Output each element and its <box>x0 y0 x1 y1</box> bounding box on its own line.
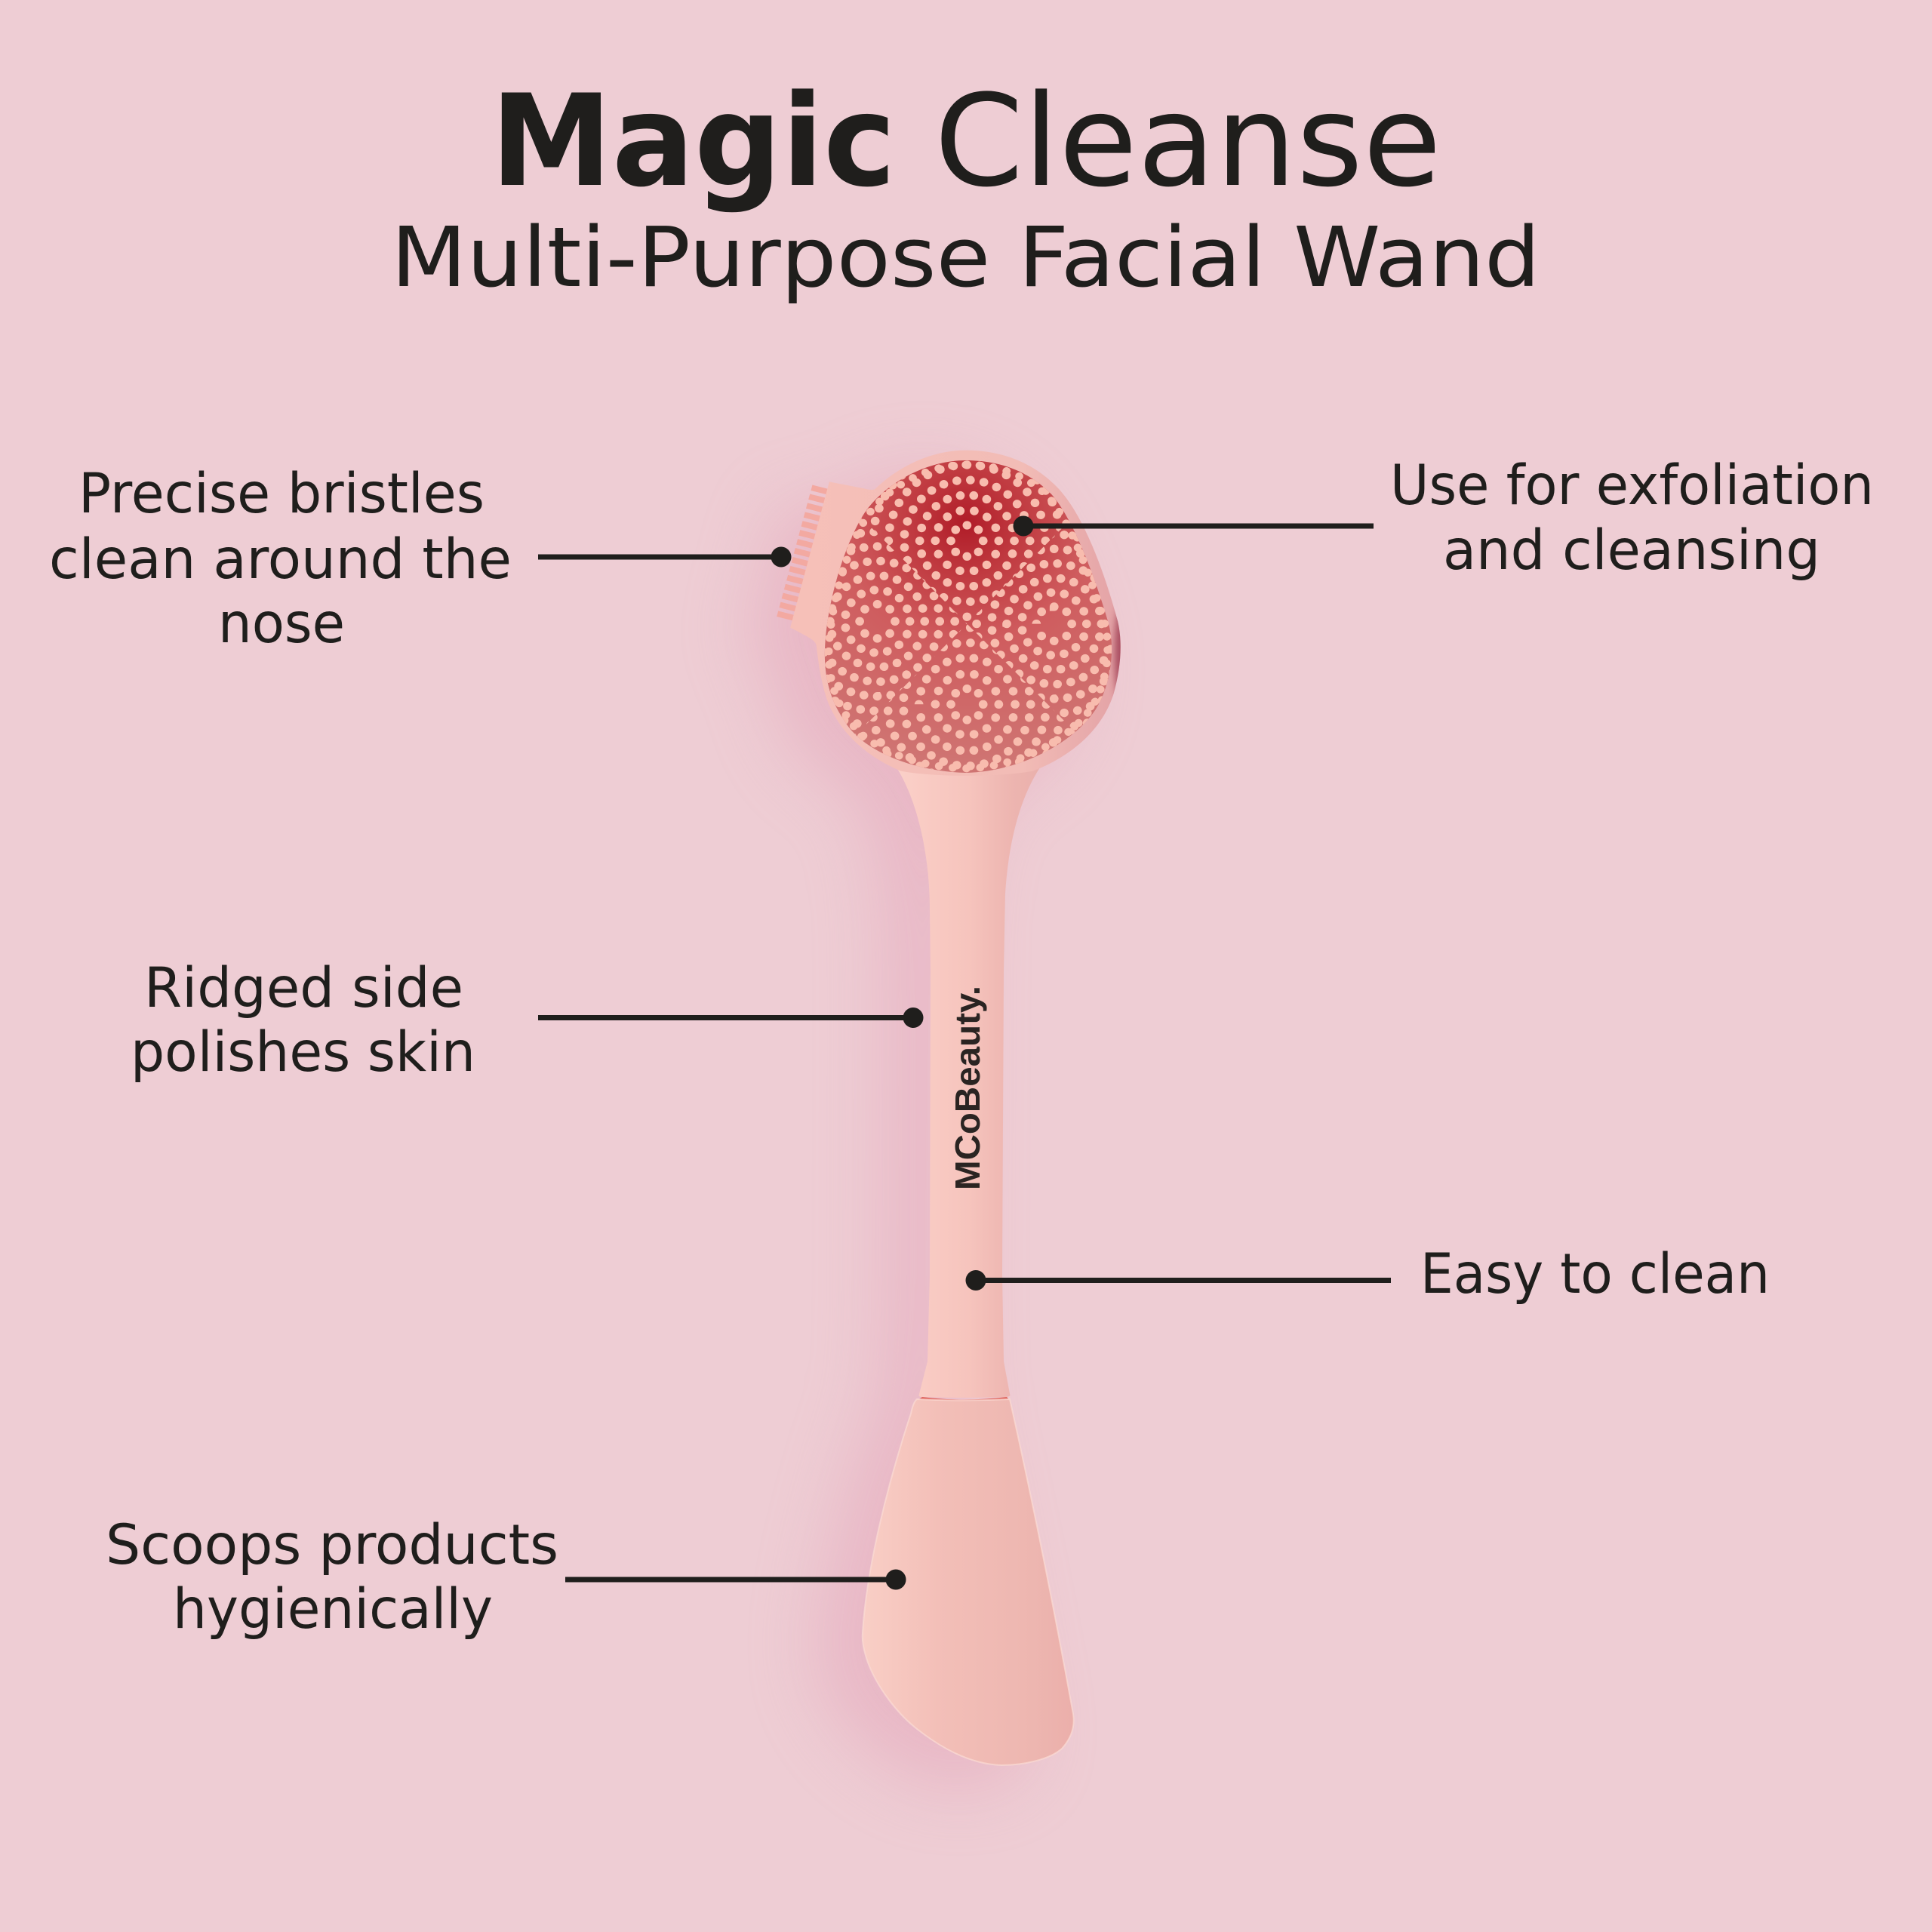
label: clean around the <box>49 528 512 592</box>
bristle dots <box>825 460 1112 770</box>
subtitle: Multi-Purpose Facial Wand <box>391 209 1540 306</box>
brush head <box>777 450 1121 776</box>
label: Ridged side <box>144 956 463 1020</box>
product: facial wand <box>777 450 1121 1766</box>
callout: precise bristles <box>49 462 791 656</box>
title: Magic Cleanse: Cleanse <box>934 67 1441 215</box>
callout: ridged side <box>131 956 924 1084</box>
label <box>131 956 475 1084</box>
brand logo on handle: MCoBeauty. <box>948 986 987 1190</box>
leader line <box>538 546 791 568</box>
title <box>391 67 1540 306</box>
dark edge on right of head <box>1110 610 1121 694</box>
side bristles <box>784 487 820 621</box>
product shadow <box>745 472 1075 1786</box>
label <box>49 462 512 656</box>
label: Easy to clean <box>1420 1242 1770 1306</box>
label <box>106 1513 558 1641</box>
label: Precise bristles <box>78 462 485 526</box>
leader line <box>966 1270 1391 1291</box>
label: hygienically <box>173 1577 493 1641</box>
gap between handle and spatula <box>917 1397 1010 1401</box>
label: and cleansing <box>1443 518 1820 583</box>
label <box>1390 454 1874 583</box>
red cleansing pad <box>825 460 1112 773</box>
label: nose <box>218 592 345 656</box>
spatula <box>863 1399 1074 1765</box>
wand neck and handle <box>897 768 1040 1398</box>
label: Scoops products <box>106 1513 558 1577</box>
silicone head body <box>790 451 1121 776</box>
callout: scoops products <box>106 1513 906 1641</box>
title: Magic Cleanse: Magic <box>491 67 896 215</box>
rim bristle row <box>829 465 1108 768</box>
leader line <box>538 1008 924 1028</box>
leader line <box>565 1570 906 1589</box>
label: Use for exfoliation <box>1390 454 1874 518</box>
label: polishes skin <box>131 1020 475 1084</box>
callout: exfoliation <box>1013 454 1874 583</box>
callout: easy to clean <box>966 1242 1770 1306</box>
leader line <box>1013 516 1374 536</box>
